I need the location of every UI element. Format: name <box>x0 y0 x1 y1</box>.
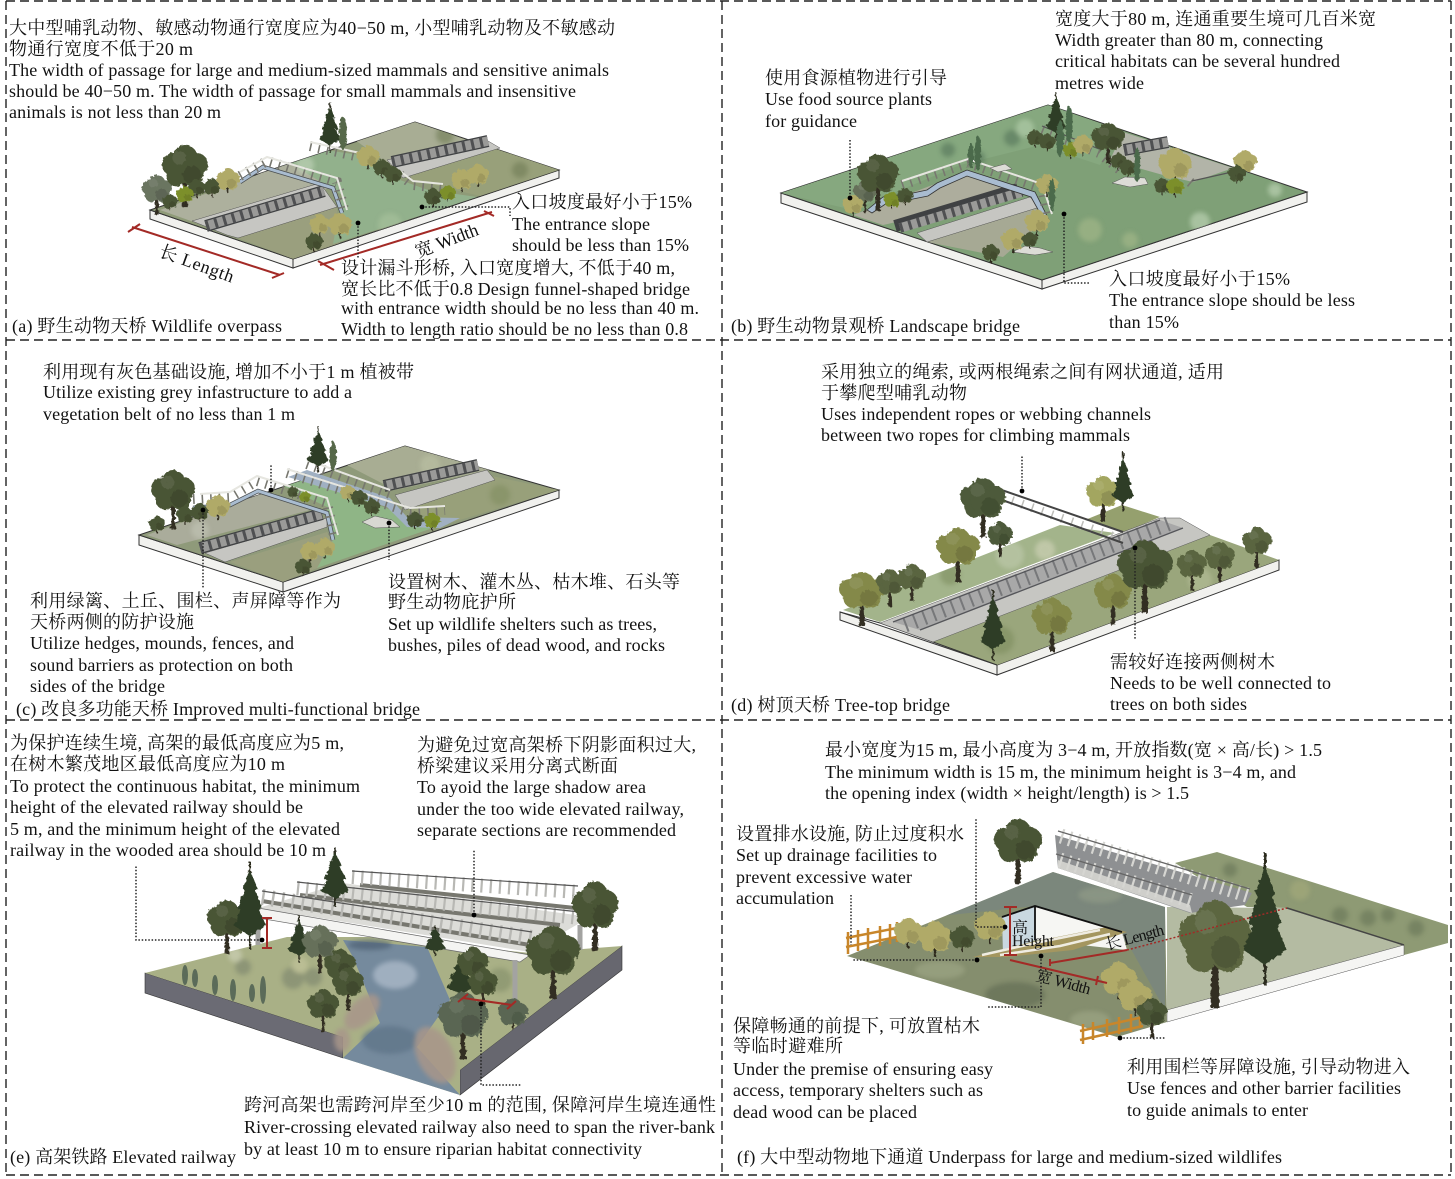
text: fences: Use fences and other barrier facilities <box>1127 1078 1401 1098</box>
text: fences: 利用围栏等屏障设施, 引导动物进入 <box>1127 1057 1410 1077</box>
text: vegetation belt: vegetation belt of no less than 1 m <box>43 404 295 424</box>
text: protective facilities: Utilize hedges, mounds, fences, and <box>30 633 294 653</box>
text: passage width: 大中型哺乳动物、敏感动物通行宽度应为40−50 m, 小型哺乳动物及不敏感动 <box>9 18 615 38</box>
text: dead wood shelter: 保障畅通的前提下, 可放置枯木 <box>733 1016 980 1036</box>
leader: rope bridge <box>1020 455 1024 493</box>
text: opening index: 最小宽度为15 m, 最小高度为 3−4 m, 开放指数(宽 × 高/长) > 1.5 <box>825 740 1322 761</box>
text: drainage: accumulation <box>736 888 834 908</box>
text: separate sections: To ayoid the large shadow area <box>417 777 646 797</box>
diagram: improved multi-functional bridge <box>139 426 559 592</box>
text: protective facilities <box>30 591 341 696</box>
panel: (c) improved multi-functional bridge <box>16 362 680 720</box>
bridge over underpass <box>1055 831 1252 913</box>
text: width greater than 80 m <box>1055 9 1376 93</box>
diagram: elevated railway <box>145 847 622 1095</box>
text: protective facilities: sides of the bridge <box>30 676 165 696</box>
text: entrance slope: 入口坡度最好小于15% <box>1109 269 1290 289</box>
panel: (e) elevated railway <box>10 733 716 1168</box>
text: entrance slope <box>1109 269 1355 332</box>
text: dead wood shelter <box>733 1016 993 1122</box>
trees and shrubs <box>894 819 1287 1038</box>
leader: drainage <box>976 818 1007 929</box>
text: width greater than 80 m: metres wide <box>1055 73 1144 93</box>
leader: minimum height <box>136 865 264 942</box>
text: river-bank span: 跨河高架也需跨河岸至少10 m 的范围, 保障河岸生境连通性 <box>244 1095 716 1115</box>
caption (e): (e) 高架铁路 Elevated railway <box>10 1147 236 1168</box>
label: height: 高 <box>1012 918 1028 937</box>
text: drainage: prevent excessive water <box>736 867 912 887</box>
trees and shrubs <box>149 426 440 576</box>
caption (f): (f) 大中型动物地下通道 Underpass for large and medium-sized wildlifes <box>737 1147 1282 1168</box>
text: minimum height: railway in the wooded area should be 10 m <box>10 840 326 860</box>
text: vegetation belt <box>43 362 414 424</box>
leader: fences <box>1118 1036 1165 1040</box>
fences <box>846 922 1143 1044</box>
caption (d): (d) 树顶天桥 Tree-top bridge <box>731 695 950 716</box>
text: funnel-shaped bridge: 宽长比不低于0.8 Design funnel-shaped bridge <box>341 279 690 299</box>
text: dead wood shelter: 等临时避难所 <box>733 1036 843 1056</box>
label: width: 宽 Width <box>1034 966 1093 998</box>
leader: accumulation <box>851 895 979 962</box>
text: minimum height: 在树木繁茂地区最低高度应为10 m <box>10 754 285 774</box>
text: ropes and webbing: 于攀爬型哺乳动物 <box>821 383 967 403</box>
text: minimum height: 为保护连续生境, 高架的最低高度应为5 m, <box>10 733 344 753</box>
text: river-bank span: River-crossing elevated railway also need to span the river-bank <box>244 1117 715 1137</box>
dimension: width <box>318 211 494 270</box>
label: height: Height <box>1012 933 1055 950</box>
leader: vegetation belt <box>269 465 273 492</box>
text: opening index: The minimum width is 15 m, the minimum height is 3−4 m, and <box>825 762 1296 782</box>
text: drainage: 设置排水设施, 防止过度积水 <box>736 824 964 844</box>
text: separate sections: 桥梁建议采用分离式断面 <box>417 755 618 776</box>
text: entrance slope <box>512 192 692 255</box>
label: length: 长 Length <box>1103 921 1166 954</box>
text: funnel-shaped bridge: Width to length ratio should be no less than 0.8 <box>341 319 688 339</box>
text: wildlife shelters: 设置树木、灌木丛、枯木堆、石头等 <box>388 572 680 592</box>
text: protective facilities: 天桥两侧的防护设施 <box>30 612 194 632</box>
diagram: wildlife overpass <box>142 102 559 268</box>
text: funnel-shaped bridge <box>341 258 699 339</box>
text: wildlife shelters: 野生动物庇护所 <box>388 592 516 612</box>
text: entrance slope: The entrance slope <box>512 214 650 234</box>
leader: funnel-shaped bridge <box>356 221 360 258</box>
text: minimum height: To protect the continuous habitat, the minimum <box>10 776 360 796</box>
text: food source plants: for guidance <box>765 111 857 131</box>
text: entrance slope: should be less than 15% <box>512 235 689 255</box>
text: wildlife shelters: bushes, piles of dead wood, and rocks <box>388 635 665 655</box>
text: connected trees <box>1110 652 1331 714</box>
text: dead wood shelter: Under the premise of ensuring easy <box>733 1059 993 1079</box>
text: passage width: The width of passage for large and medium-sized mammals and sensitive animals <box>9 60 609 80</box>
text: width greater than 80 m: critical habitats can be several hundred <box>1055 51 1340 71</box>
text: drainage: Set up drainage facilities to <box>736 845 937 865</box>
text: connected trees: 需较好连接两侧树木 <box>1110 652 1275 672</box>
caption (c): (c) 改良多功能天桥 Improved multi-functional bridge <box>16 699 420 720</box>
text: vegetation belt: 利用现有灰色基础设施, 增加不小于1 m 植被带 <box>43 362 414 382</box>
elevated deck and rails <box>258 871 590 1001</box>
text: protective facilities: 利用绿篱、土丘、围栏、声屏障等作为 <box>30 591 341 611</box>
text: width greater than 80 m: Width greater than 80 m, connecting <box>1055 30 1323 50</box>
dimension: length <box>128 224 284 286</box>
text: dead wood shelter: access, temporary shelters such as <box>733 1080 983 1100</box>
leader: protective facilities <box>201 508 205 588</box>
leader: connected trees <box>1133 546 1137 640</box>
text: ropes and webbing: Uses independent ropes or webbing channels <box>821 404 1151 424</box>
text: wildlife shelters <box>388 572 680 655</box>
diagram: underpass <box>846 819 1448 1044</box>
dimension lines <box>1004 907 1287 985</box>
trees <box>207 847 618 1060</box>
text: opening index <box>825 740 1322 804</box>
panel: (a) wildlife overpass <box>9 18 699 339</box>
text: entrance slope: 入口坡度最好小于15% <box>512 192 692 212</box>
rock pile <box>362 516 400 528</box>
text: connected trees: trees on both sides <box>1110 694 1247 714</box>
text: minimum height: height of the elevated railway should be <box>10 797 303 817</box>
text: food source plants: 使用食源植物进行引导 <box>765 68 947 88</box>
leader: dead wood shelter <box>988 954 1043 1007</box>
text: separate sections: 为避免过宽高架桥下阴影面积过大, <box>417 735 696 755</box>
dimension: length: 长 Length <box>157 241 237 286</box>
leader: entrance slope <box>420 205 510 216</box>
text: entrance slope: than 15% <box>1109 312 1179 332</box>
text: separate sections: under the too wide elevated railway, <box>417 799 684 819</box>
text: food source plants: Use food source plants <box>765 89 932 109</box>
text: fences: to guide animals to enter <box>1127 1100 1308 1120</box>
panel: (d) tree-top bridge <box>731 361 1331 716</box>
text: ropes and webbing: between two ropes for climbing mammals <box>821 425 1130 445</box>
diagram: tree-top bridge <box>839 452 1279 675</box>
leader: river-bank span <box>479 1002 521 1085</box>
rope bridge <box>996 488 1123 543</box>
text: vegetation belt: Utilize existing grey infastructure to add a <box>43 382 352 402</box>
text: passage width: should be 40−50 m. The width of passage for small mammals and insensitive <box>9 81 576 101</box>
text: funnel-shaped bridge: 设计漏斗形桥, 入口宽度增大, 不低于40 m, <box>341 258 675 278</box>
label: height <box>1012 918 1055 950</box>
panel: (f) underpass <box>733 740 1448 1168</box>
text: width greater than 80 m: 宽度大于80 m, 连通重要生境可几百米宽 <box>1055 9 1376 29</box>
caption (a): (a) 野生动物天桥 Wildlife overpass <box>12 316 282 337</box>
river <box>343 940 460 1095</box>
text: drainage <box>736 824 964 908</box>
text: funnel-shaped bridge: with entrance width should be no less than 40 m. <box>341 298 699 318</box>
dimension: width: 宽 Width <box>412 219 481 262</box>
text: ropes and webbing <box>821 361 1224 445</box>
text: passage width: animals is not less than 20 m <box>9 102 221 122</box>
trees <box>839 452 1272 660</box>
text: minimum height <box>10 733 360 860</box>
text: dead wood shelter: dead wood can be placed <box>733 1102 917 1122</box>
underpass opening <box>973 906 1127 957</box>
leader: food source plants <box>848 140 852 200</box>
caption (b): (b) 野生动物景观桥 Landscape bridge <box>731 316 1020 337</box>
height and river-bank markers <box>262 918 516 1009</box>
leader: entrance slope <box>1062 212 1090 283</box>
text: entrance slope: The entrance slope should be less <box>1109 290 1355 310</box>
text: passage width: 物通行宽度不低于20 m <box>9 39 193 59</box>
text: river-bank span: by at least 10 m to ensure riparian habitat connectivity <box>244 1139 642 1159</box>
trees and shrubs <box>843 92 1257 263</box>
text: separate sections: separate sections are recommended <box>417 820 676 840</box>
text: minimum height: 5 m, and the minimum height of the elevated <box>10 819 340 839</box>
leader: wildlife shelters <box>387 521 391 560</box>
text: opening index: the opening index (width × height/length) is > 1.5 <box>825 783 1189 804</box>
text: fences <box>1127 1057 1410 1120</box>
text: protective facilities: sound barriers as protection on both <box>30 655 293 675</box>
rock piles <box>990 164 1148 255</box>
leader: separate sections <box>472 850 476 917</box>
text: food source plants <box>765 68 947 131</box>
diagram: landscape bridge <box>781 92 1307 289</box>
text: wildlife shelters: Set up wildlife shelters such as trees, <box>388 614 657 634</box>
panel: (b) landscape bridge <box>731 9 1376 337</box>
trees and shrubs <box>142 102 489 252</box>
text: ropes and webbing: 采用独立的绳索, 或两根绳索之间有网状通道, 适用 <box>821 361 1224 382</box>
text: passage width <box>9 18 615 122</box>
text: separate sections <box>417 735 696 840</box>
text: connected trees: Needs to be well connected to <box>1110 673 1331 693</box>
text: river-bank span <box>244 1095 716 1159</box>
